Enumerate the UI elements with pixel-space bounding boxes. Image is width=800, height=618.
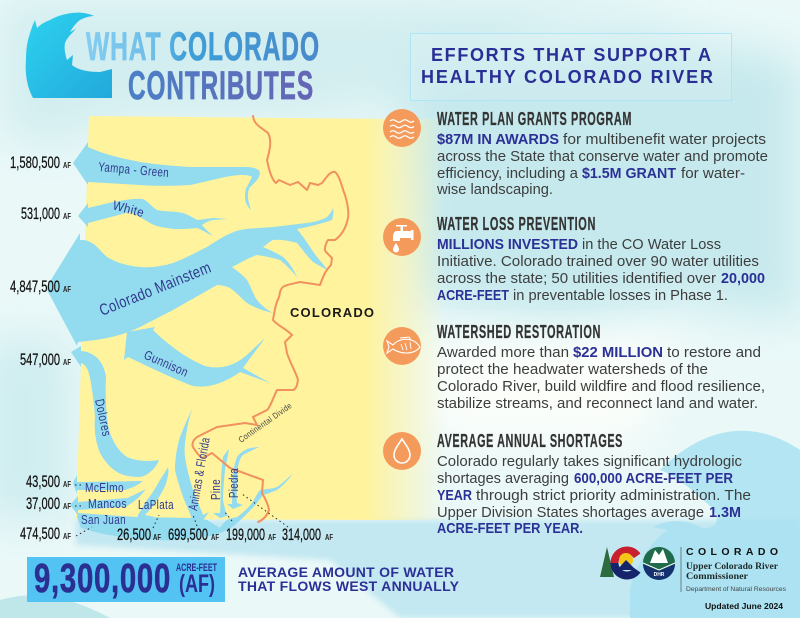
river: Pine (213, 449, 230, 518)
icon: water waves (383, 109, 421, 147)
flow values in acre-feet (10, 153, 333, 544)
text block: average annual shortages: AVERAGE ANNUAL SHORTAGES (437, 431, 623, 451)
map label: Colorado: COLORADO (290, 305, 374, 320)
flow values in acre-feet: AF (63, 502, 71, 511)
text block: watershed restoration: $22 MILLION (573, 344, 663, 361)
flow values in acre-feet: AF (211, 533, 219, 542)
flow values in acre-feet: 531,000 (21, 204, 60, 223)
title: CONTRIBUTES (128, 64, 314, 108)
flow values in acre-feet: 1,580,500 (10, 153, 60, 172)
map label: Continental Divide: Continental Divide (236, 400, 294, 445)
text block: watershed restoration: to restore and (667, 344, 761, 361)
text block: water loss prevention: 20,000 (721, 270, 765, 287)
callout caption: THAT FLOWS WEST ANNUALLY (238, 578, 460, 594)
river name labels: Colorado Mainstem (97, 259, 214, 320)
callout caption (238, 564, 460, 594)
flow values in acre-feet: 4,847,500 (10, 277, 60, 296)
flow values in acre-feet: AF (63, 161, 71, 170)
river name labels (81, 159, 241, 527)
text block: water plan grants: WATER PLAN GRANTS PROGRAM (437, 109, 632, 129)
text block: average annual shortages: 600,000 ACRE-FEET PER (574, 470, 733, 487)
organization name: Commissioner (686, 572, 749, 582)
west slope rivers (46, 142, 333, 540)
text block: water plan grants (436, 109, 768, 198)
river: Dolores (71, 346, 159, 477)
text block: water plan grants: $1.5M GRANT (582, 165, 676, 182)
flow values in acre-feet: 199,000 (226, 525, 265, 544)
organization name: COLORADO (686, 546, 778, 558)
text block: water loss prevention (437, 214, 765, 304)
callout caption: AVERAGE AMOUNT OF WATER (238, 564, 454, 580)
heading box: efforts: EFFORTS THAT SUPPORT A (431, 45, 711, 65)
river: Piedra (227, 447, 259, 509)
text block: watershed restoration: Colorado River, build wildfire and flood resilience, (437, 378, 765, 395)
dotted leader lines (75, 485, 288, 536)
decorative background wave (630, 431, 800, 618)
river: San Juan (77, 473, 293, 540)
text block: water loss prevention: Initiative. Colorado trained over 90 water utilities (437, 253, 759, 270)
total flow callout: (AF) (179, 570, 215, 598)
flow values in acre-feet: AF (268, 533, 276, 542)
icon: faucet (383, 218, 421, 256)
logo: DHR: DHR (654, 572, 665, 578)
river name labels: Mancos (88, 496, 127, 511)
text block: water plan grants: efficiency, including a (437, 165, 579, 182)
text block: water loss prevention: ACRE-FEET (437, 287, 509, 304)
text block: water loss prevention: MILLIONS INVESTED (437, 236, 578, 253)
flow values in acre-feet: 314,000 (282, 525, 321, 544)
river: Animas and Florida (175, 407, 209, 527)
text block: water plan grants: $87M IN AWARDS (437, 131, 559, 148)
flow values in acre-feet: AF (153, 533, 161, 542)
title (86, 25, 320, 108)
text block: water loss prevention: across the state; 50 utilities identified over (437, 270, 716, 287)
flow values in acre-feet: AF (63, 285, 71, 294)
river: La Plata (137, 467, 168, 522)
flow values in acre-feet: 26,500 (117, 525, 151, 544)
river name labels: San Juan (81, 512, 126, 527)
logo divider (680, 547, 682, 592)
river name labels: Dolores (92, 398, 115, 438)
text block: average annual shortages: 1.3M (709, 504, 741, 521)
text block: average annual shortages: Colorado regularly takes significant hydrologic (437, 453, 742, 470)
text block: watershed restoration (437, 322, 765, 412)
organization name (686, 546, 787, 593)
flow values in acre-feet: 699,500 (168, 525, 208, 544)
text block: water plan grants: for water- (681, 165, 745, 182)
river name labels: LaPlata (138, 497, 174, 512)
flow values in acre-feet: 43,500 (26, 472, 60, 491)
text block: water loss prevention: in preventable losses in Phase 1. (513, 287, 728, 304)
logo: Colorado state (600, 547, 637, 577)
river: McElmo (73, 475, 143, 494)
icon: wave logo (26, 13, 112, 98)
river name labels: Gunnison (142, 347, 191, 380)
river name labels: Piedra (226, 468, 241, 498)
continental divide line (192, 116, 348, 522)
flow values in acre-feet: 37,000 (26, 494, 60, 513)
text block: average annual shortages: YEAR (437, 487, 472, 504)
flow values in acre-feet: AF (63, 532, 71, 541)
text block: watershed restoration: Awarded more than (437, 344, 569, 361)
flow values in acre-feet: AF (63, 358, 71, 367)
total flow callout: ACRE-FEET (176, 562, 217, 574)
text block: watershed restoration: protect the headwater watersheds of the (437, 361, 708, 378)
text block: water loss prevention: in the CO Water Loss (582, 236, 721, 253)
river name labels: White (111, 197, 146, 220)
river: Yampa-Green (73, 142, 260, 210)
map of Colorado (76, 116, 445, 520)
text block: watershed restoration: WATERSHED RESTORATION (437, 322, 601, 342)
text block: water plan grants: for multibenefit water projects (563, 131, 766, 148)
text block: average annual shortages (437, 431, 751, 537)
icon: water drop (383, 432, 421, 470)
text block: water plan grants: wise landscaping. (436, 181, 553, 198)
organization name: Upper Colorado River (686, 562, 779, 572)
title: WHAT COLORADO (86, 25, 320, 69)
flow values in acre-feet: 474,500 (20, 524, 60, 543)
river name labels: Yampa - Green (98, 159, 170, 180)
organization name: Department of Natural Resources (686, 586, 787, 593)
heading box: efforts (410, 34, 732, 100)
text block: watershed restoration: stabilize streams, and reconnect land and water. (437, 395, 758, 412)
flow values in acre-feet: AF (325, 533, 333, 542)
flow values in acre-feet: 547,000 (20, 350, 60, 369)
flow values in acre-feet: AF (63, 212, 71, 221)
text block: average annual shortages: ACRE-FEET PER YEAR. (437, 520, 583, 537)
icon: fish (383, 327, 421, 365)
river name labels: Animas & Florida (185, 436, 213, 512)
total flow callout: 9,300,000 (34, 555, 171, 601)
flow values in acre-feet: AF (63, 480, 71, 489)
river name labels: McElmo (85, 480, 124, 495)
river name labels: Pine (208, 479, 223, 500)
text block: average annual shortages: through strict priority administration. The (476, 487, 751, 504)
river: White (78, 199, 228, 236)
text block: average annual shortages: Upper Division States shortages average (437, 504, 704, 521)
river: Mancos (70, 489, 146, 515)
update date: Updated June 2024 (705, 601, 783, 611)
heading box: efforts: HEALTHY COLORADO RIVER (421, 67, 713, 87)
text block: water plan grants: across the State that conserve water and promote (437, 148, 768, 165)
text block: average annual shortages: shortages averaging (437, 470, 569, 487)
text block: water loss prevention: WATER LOSS PREVENTION (437, 214, 596, 234)
logo: DHR (643, 547, 675, 580)
river: Gunnison (124, 327, 270, 387)
river: Colorado Mainstem (46, 208, 333, 346)
